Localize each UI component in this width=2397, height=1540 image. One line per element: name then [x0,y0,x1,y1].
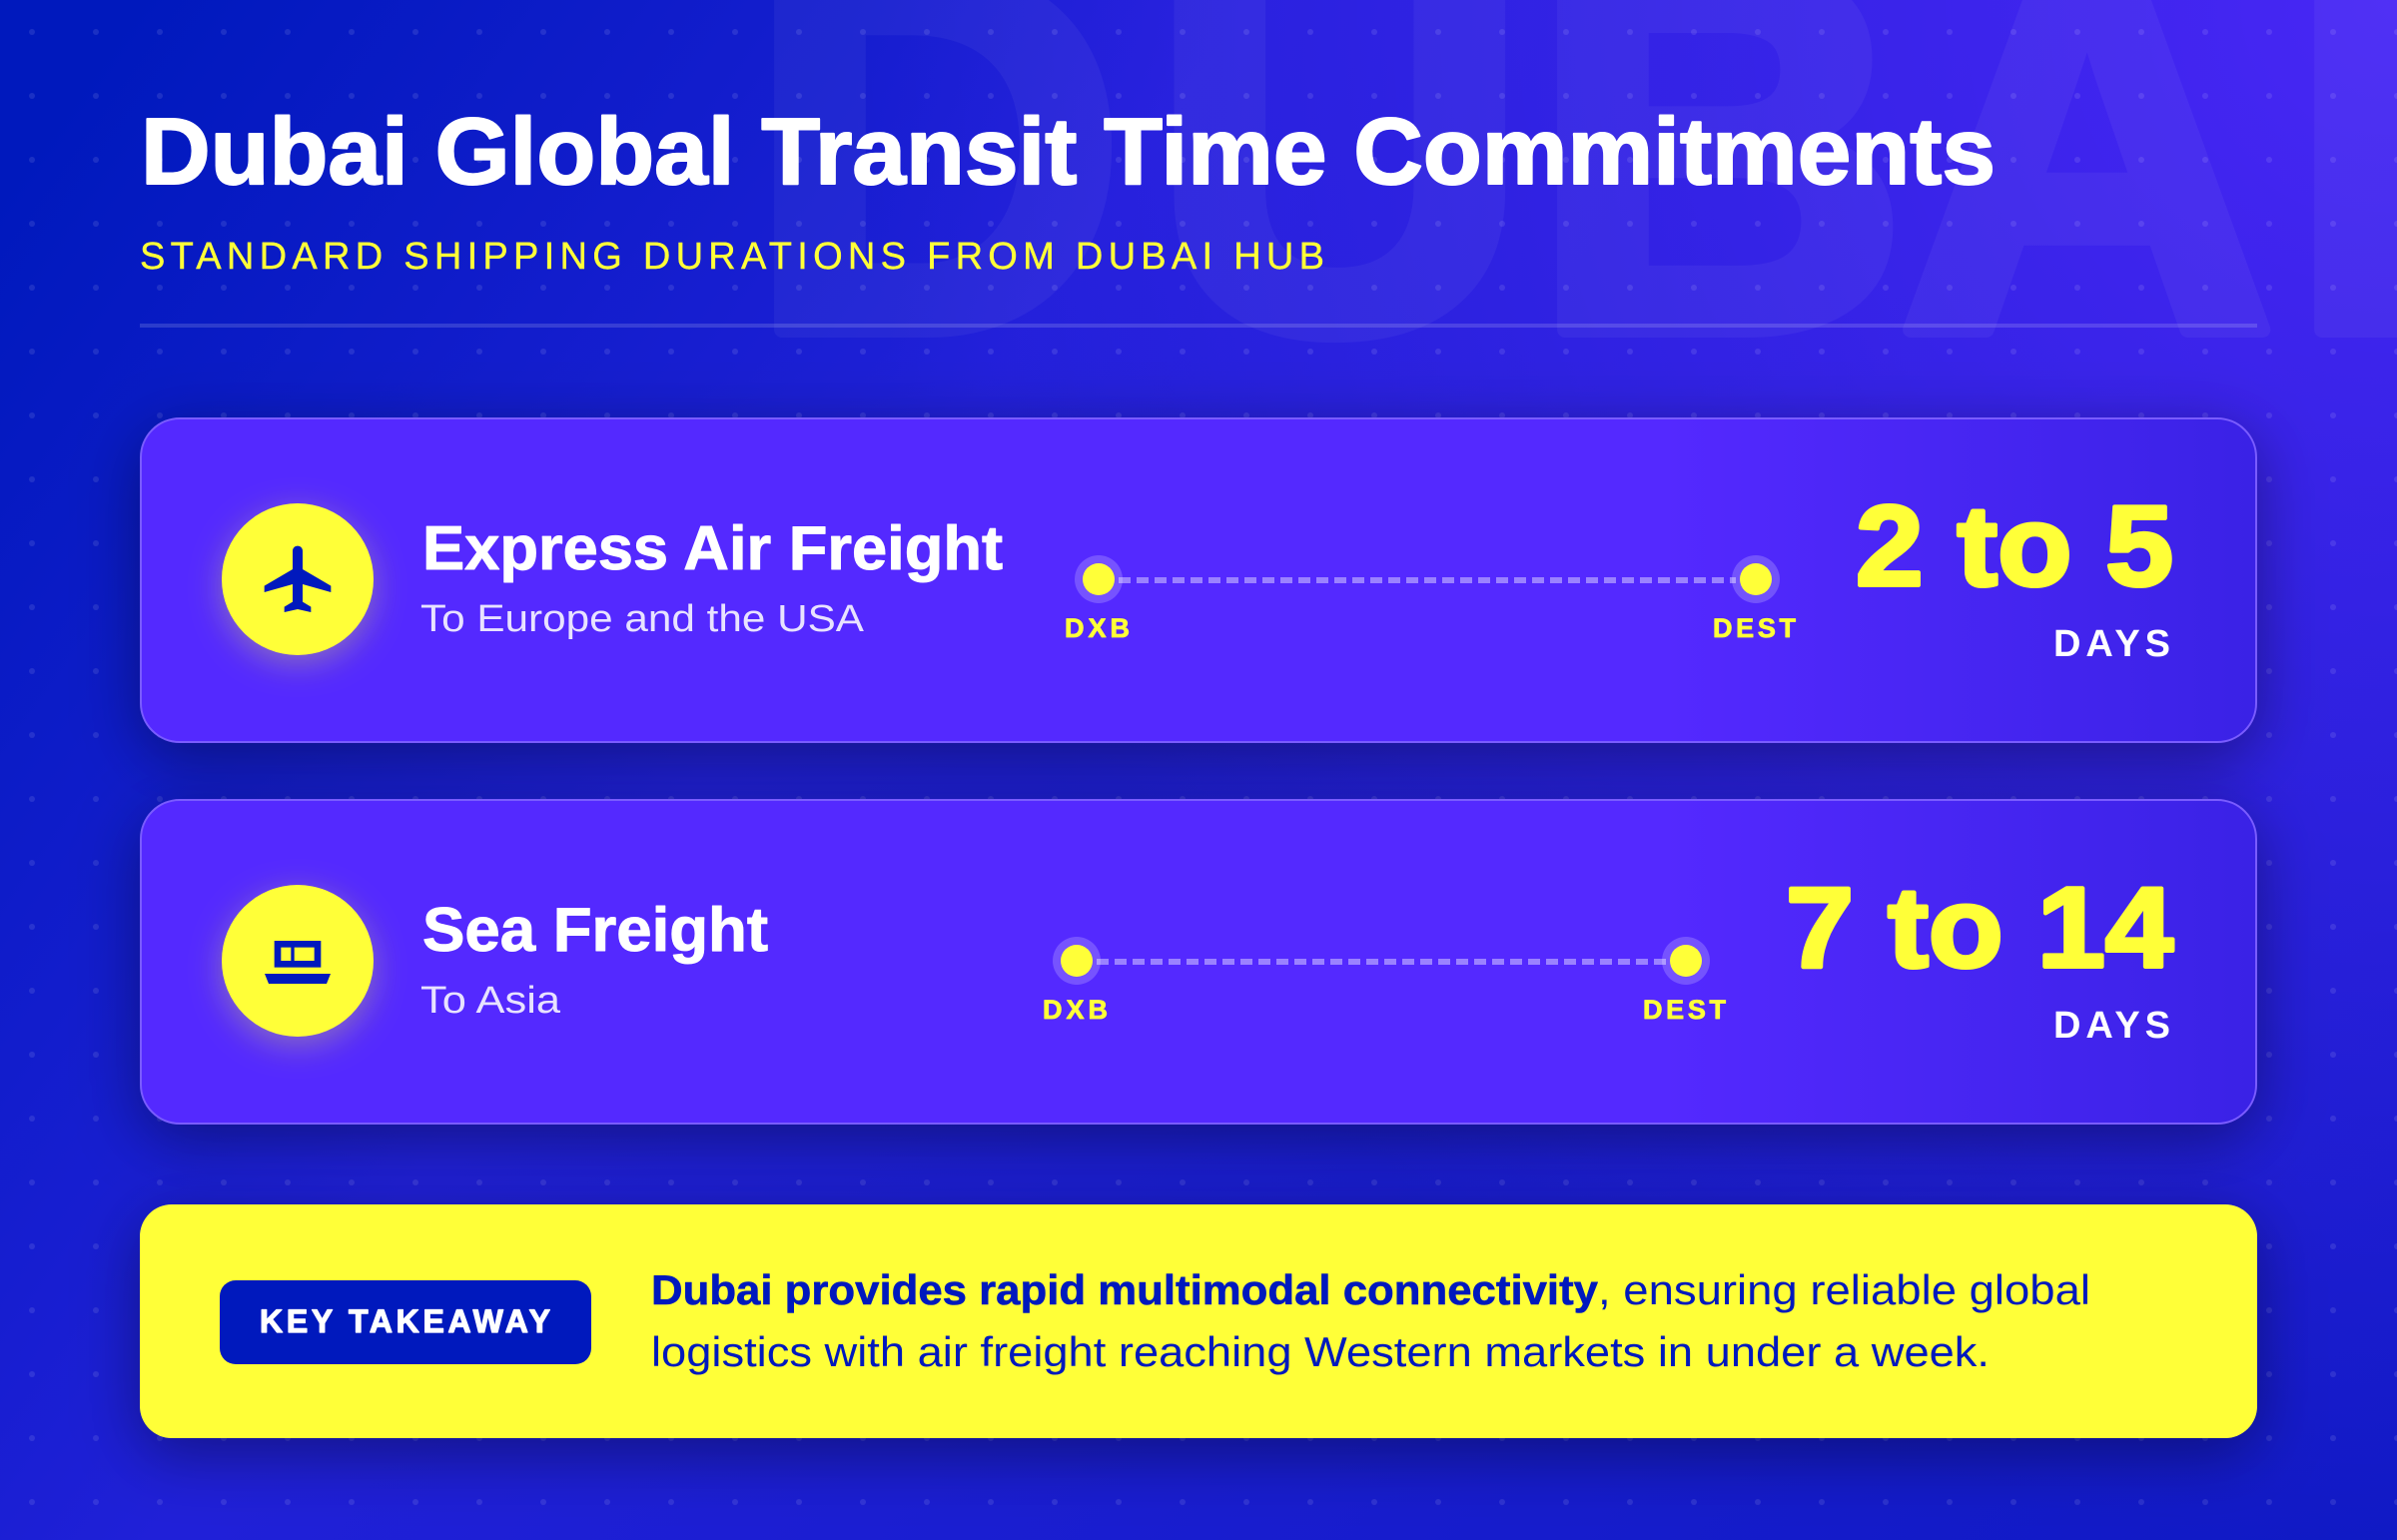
panel: express air freight [140,418,2257,759]
header divider [140,324,2257,328]
route line: DXB to DEST: DXB [1065,613,1130,643]
callout: key takeaway [140,1204,2257,1454]
takeaway text: Dubai provides rapid multimodal connectivity [651,1266,1599,1313]
card background [141,800,2256,1124]
route line: DXB to DEST [1043,937,1726,1025]
route line: DXB to DEST: DXB [1043,995,1108,1025]
title: Dubai Global Transit Time Commitments [141,99,1996,205]
subheading: to europe and the usa: To Europe and the USA [420,598,865,640]
subtitle: STANDARD SHIPPING DURATIONS FROM DUBAI HUB [140,236,1324,278]
badge: key takeaway: KEY TAKEAWAY [260,1303,550,1339]
panel: sea freight [140,800,2257,1141]
card background [141,418,2256,742]
callout background [140,1204,2257,1438]
route line: DXB to DEST [1065,555,1796,643]
icon: ship [222,885,374,1045]
duration: 2 to 5 days: 2 to 5 [1856,483,2173,610]
duration: 7 to 14 days: 7 to 14 [1786,865,2173,992]
takeaway text: logistics with air freight reaching Western markets in under a week. [651,1328,1990,1375]
takeaway text: , ensuring reliable global [1598,1266,2090,1313]
icon: airplane [222,503,374,663]
badge: key takeaway [220,1280,591,1364]
takeaway text [651,1266,2090,1375]
heading: express air freight: Express Air Freight [422,514,1003,583]
route line: DXB to DEST: DEST [1713,613,1796,643]
duration: 2 to 5 days [1856,483,2173,665]
duration: 2 to 5 days: DAYS [2053,623,2170,665]
heading: sea freight: Sea Freight [422,896,768,965]
duration: 7 to 14 days [1786,865,2173,1047]
subheading: to asia: To Asia [420,980,561,1022]
duration: 7 to 14 days: DAYS [2053,1005,2170,1047]
route line: DXB to DEST: DEST [1643,995,1726,1025]
